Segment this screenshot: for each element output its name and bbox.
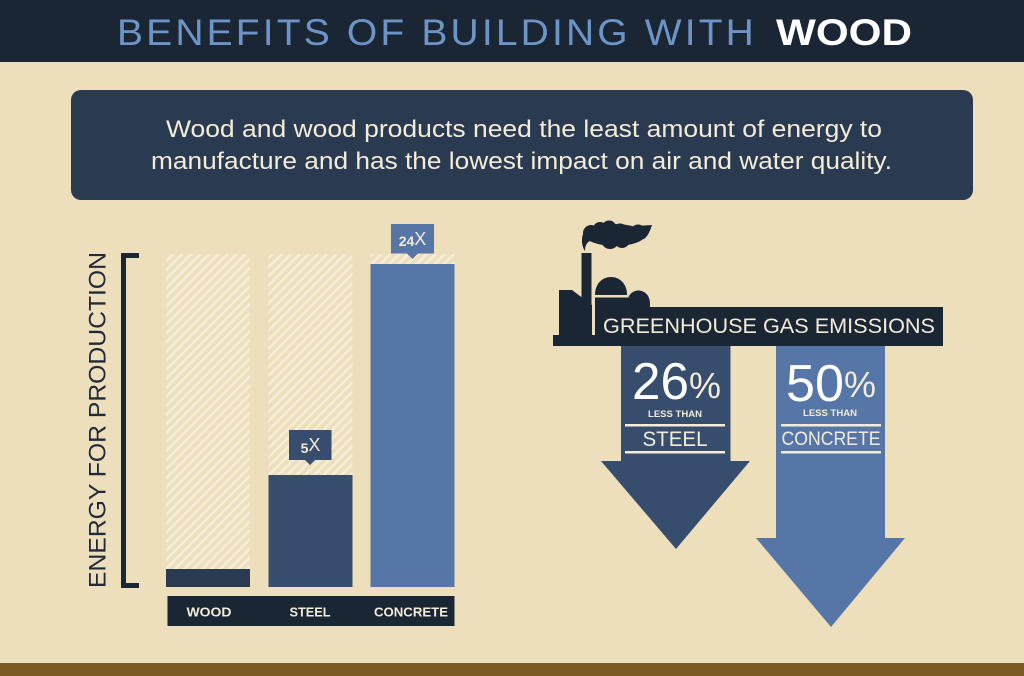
arrow: 50% less than concrete: % [844, 364, 876, 405]
bar: wood [166, 254, 250, 587]
header band with title [0, 0, 1024, 62]
callout: 24X: 24 [399, 233, 414, 249]
axis bracket [124, 256, 139, 586]
callout: 5X: 5 [301, 440, 309, 456]
intro panel: manufacture and has the lowest impact on air and water quality. [151, 148, 892, 175]
axis label: ENERGY FOR PRODUCTION [84, 252, 112, 588]
title: BENEFITS OF BUILDING WITH [117, 12, 757, 53]
title emphasis: WOOD: WOOD [776, 12, 912, 53]
category labels: CONCRETE [374, 604, 448, 620]
category labels: WOOD [186, 604, 232, 620]
callout: 5X [289, 430, 332, 465]
bar chart: energy for production [84, 224, 454, 626]
bar: steel [268, 254, 352, 587]
arrow: 26% less than steel: 26 [632, 353, 689, 411]
arrow: 26% less than steel [601, 346, 750, 549]
icon: factory with smoke [559, 220, 652, 336]
callout: 24X: X [414, 229, 426, 249]
arrow: 50% less than concrete: LESS THAN [803, 408, 857, 418]
footer strip [0, 663, 1024, 676]
arrow: 26% less than steel: LESS THAN [648, 409, 702, 419]
intro panel: Wood and wood products need the least amount of energy to [166, 116, 882, 143]
greenhouse gas emissions banner [553, 300, 943, 346]
intro panel [71, 90, 973, 200]
arrow: 50% less than concrete: CONCRETE [782, 429, 880, 450]
arrow: 26% less than steel: % [689, 365, 721, 406]
category labels [168, 596, 454, 626]
arrow: 50% less than concrete [756, 346, 905, 627]
greenhouse gas emissions banner: GREENHOUSE GAS EMISSIONS [603, 315, 935, 338]
callout: 5X: X [308, 435, 320, 455]
bar: concrete [370, 254, 454, 587]
callout: 24X [391, 224, 434, 259]
category labels: STEEL [290, 604, 331, 620]
arrow: 50% less than concrete: 50 [786, 355, 844, 413]
arrow: 26% less than steel: STEEL [642, 428, 708, 451]
